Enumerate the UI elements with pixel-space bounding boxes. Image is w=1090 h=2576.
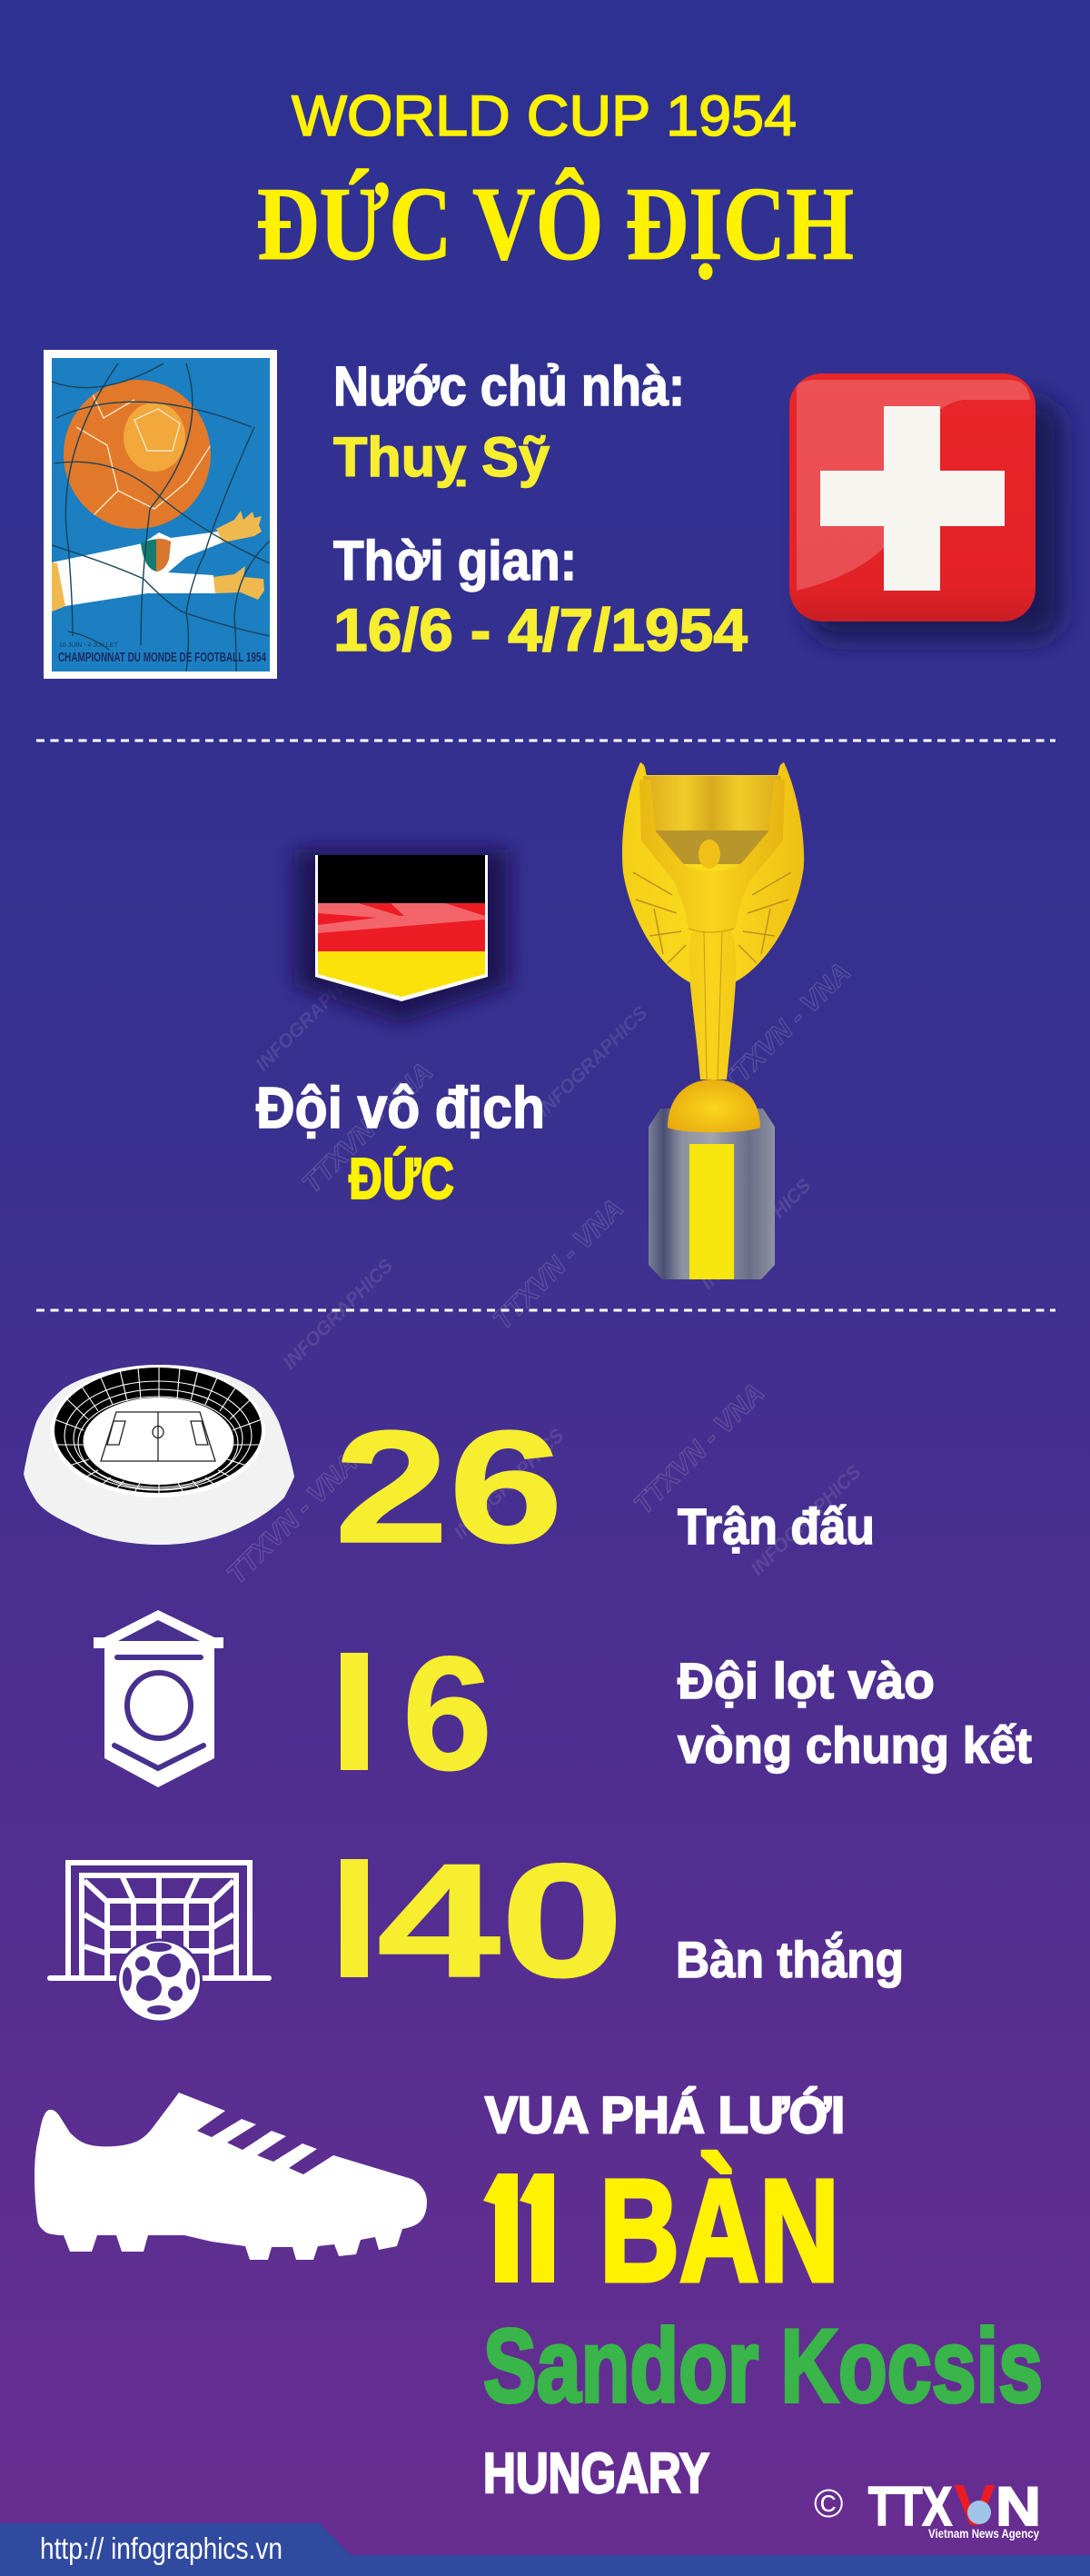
watermarks: INFOGRAPHICS xyxy=(279,1255,397,1374)
title: Đức vô địch: ĐỨC VÔ ĐỊCH xyxy=(256,166,854,283)
poster: Championnat du monde de football 1954 xyxy=(44,350,277,679)
watermarks: TTXVN - VNA xyxy=(297,1057,439,1199)
stat: 26: 26 xyxy=(334,1398,563,1576)
value: Germany: ĐỨC xyxy=(349,1146,454,1211)
value: Hungary: HUNGARY xyxy=(483,2442,709,2505)
watermarks: TTXVN - VNA xyxy=(488,1193,629,1336)
watermarks: TTXVN - VNA xyxy=(629,1378,770,1520)
footer: website strip xyxy=(0,2523,1090,2576)
title: World Cup 1954: WORLD CUP 1954 xyxy=(292,85,797,148)
label: teams in finals: vòng chung kết xyxy=(678,1716,1032,1774)
icon: Swiss flag xyxy=(789,373,1063,641)
value: dates: 16/6 - 4/7/1954 xyxy=(333,596,748,663)
label: dates: Thời gian: xyxy=(333,530,577,592)
label: champion team: Đội vô địch xyxy=(256,1075,545,1140)
watermarks: INFOGRAPHICS xyxy=(450,1425,568,1544)
divider xyxy=(36,1308,1055,1312)
stat: 140 xyxy=(341,1830,624,2011)
watermarks: INFOGRAPHICS xyxy=(533,1002,651,1121)
logo: TTXVN: © xyxy=(814,2482,843,2526)
label: goals: Bàn thắng xyxy=(676,1931,904,1988)
value: 11 goals: BÀN xyxy=(600,2149,839,2312)
label: teams in finals: Đội lọt vào xyxy=(678,1652,935,1709)
logo: TTXVN: Vietnam News Agency xyxy=(928,2526,1039,2541)
icon: Jules Rimet trophy xyxy=(622,762,804,1279)
poster: Championnat du monde de football 1954: 16 JUIN - 4 JUILLET xyxy=(59,642,118,649)
stat: 16 xyxy=(341,1623,492,1804)
logo: TTXVN: TTX xyxy=(868,2476,952,2537)
logo: TTXVN: V xyxy=(954,2472,996,2538)
divider xyxy=(36,740,1055,741)
icon: stadium xyxy=(24,1365,294,1545)
poster: Championnat du monde de football 1954: CHAMPIONNAT DU MONDE DE FOOTBALL 1954 xyxy=(58,650,266,665)
heading: top scorer: VUA PHÁ LƯỚI xyxy=(485,2086,845,2144)
watermarks: INFOGRAPHICS xyxy=(747,1461,865,1580)
label: host country: Nước chủ nhà: xyxy=(333,355,685,417)
watermarks: INFOGRAPHICS xyxy=(252,957,370,1076)
stat: 16: 6 xyxy=(402,1623,492,1804)
trophy base xyxy=(649,1109,775,1279)
logo: TTXVN: N xyxy=(996,2476,1041,2537)
logo: TTXVN xyxy=(814,2472,1041,2541)
watermarks: TTXVN - VNA xyxy=(715,957,857,1099)
icon: pennant xyxy=(94,1610,223,1787)
stat: 140: 40 xyxy=(377,1830,624,2011)
icon: goal and ball xyxy=(50,1863,269,2022)
watermarks: TTXVN - VNA xyxy=(222,1447,363,1590)
watermarks: INFOGRAPHICS xyxy=(697,1175,815,1294)
watermarks xyxy=(222,957,865,1590)
value: 11 goals xyxy=(483,2149,839,2312)
footer: website strip: http:// infographics.vn xyxy=(40,2531,282,2565)
icon: football boot xyxy=(35,2093,427,2260)
label: matches: Trận đấu xyxy=(678,1497,875,1555)
icon: German flag xyxy=(295,850,509,1022)
value: Switzerland: Thuỵ Sỹ xyxy=(333,426,550,488)
label: teams in finals xyxy=(678,1652,1032,1774)
